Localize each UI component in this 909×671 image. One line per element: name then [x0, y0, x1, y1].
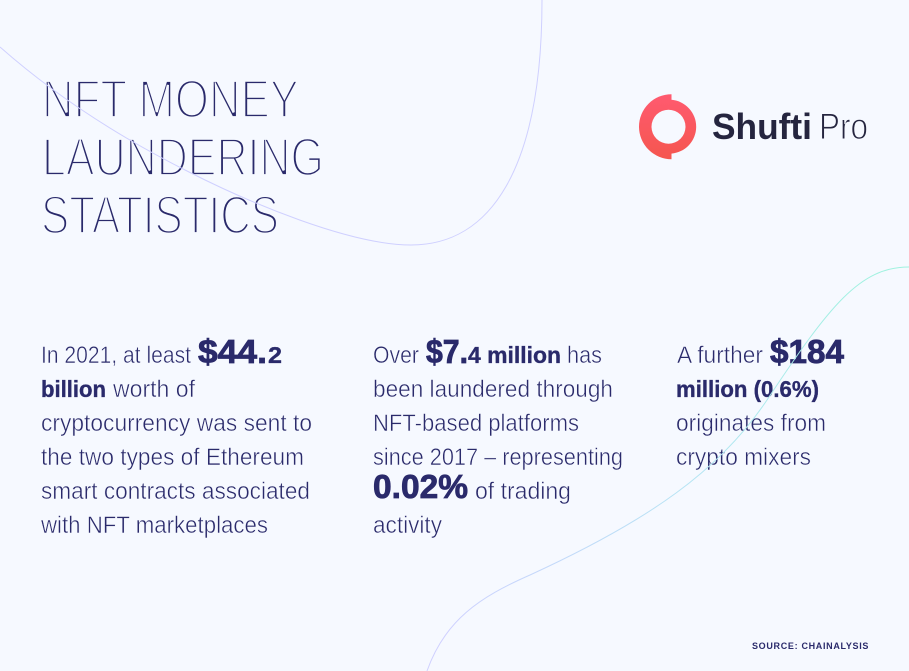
stat block: $7.4 million: 4 million [468, 342, 561, 368]
stat block: $7.4 million: has [567, 342, 602, 369]
title: NFT MONEY [42, 69, 299, 129]
logo wordmark: Shufti [712, 106, 812, 147]
stat block: $184 million: crypto mixers [676, 444, 811, 471]
stat block: $7.4 million: $7. [426, 333, 468, 370]
stat block: $7.4 million [373, 333, 623, 539]
stat block: $44.2 billion: smart contracts associated [41, 478, 310, 505]
title: LAUNDERING [42, 127, 324, 187]
logo: Shufti Pro [639, 94, 868, 159]
stat block: $44.2 billion: In 2021, at least [41, 342, 191, 369]
stat block: $44.2 billion: billion [41, 376, 106, 402]
stat block: $7.4 million: NFT-based platforms [373, 410, 579, 437]
stat block: $44.2 billion: with NFT marketplaces [40, 512, 268, 539]
stat block: $44.2 billion [40, 333, 312, 539]
icon: logo ring [639, 94, 696, 159]
title [41, 69, 324, 245]
stat block: $7.4 million: Over [373, 342, 419, 369]
stat block: $44.2 billion: cryptocurrency was sent to [41, 410, 312, 437]
stat block: $7.4 million: 0.02% [373, 468, 468, 505]
stat block: $184 million: A further [677, 342, 763, 369]
stat block: $44.2 billion: worth of [112, 376, 195, 403]
stat block: $44.2 billion: 2 [268, 342, 282, 368]
stat block: $7.4 million: activity [373, 512, 442, 539]
stat block: $184 million: originates from [676, 410, 826, 437]
stat block: $7.4 million: of trading [475, 478, 571, 505]
stat block: $184 million: $184 [770, 333, 845, 370]
title: STATISTICS [41, 185, 279, 245]
stat block: $184 million [676, 333, 845, 471]
source note: SOURCE: CHAINALYSIS [752, 641, 869, 651]
stat block: $44.2 billion: the two types of Ethereum [41, 444, 304, 471]
stat block: $7.4 million: since 2017 – representing [373, 444, 623, 471]
stat block: $184 million: million (0.6%) [676, 376, 819, 402]
logo wordmark [712, 106, 868, 147]
stat block: $44.2 billion: $44. [198, 333, 267, 370]
stat block: $7.4 million: been laundered through [373, 376, 613, 403]
logo wordmark: Pro [819, 106, 868, 147]
